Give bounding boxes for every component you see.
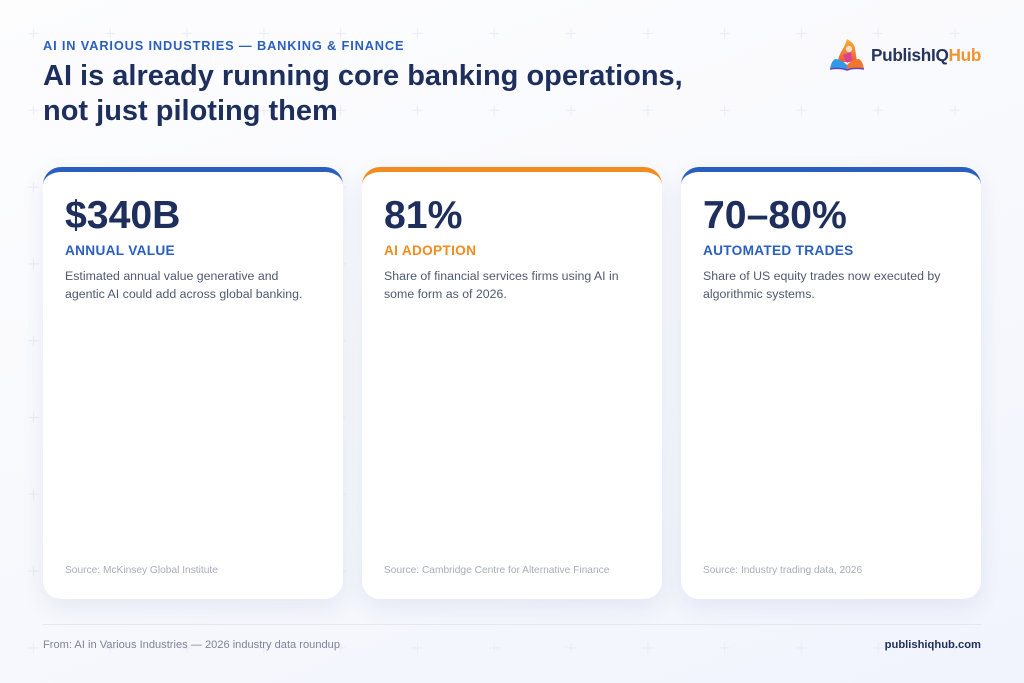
description: Share of US equity trades now executed by bbox=[703, 269, 940, 283]
stat: 81% bbox=[384, 194, 462, 237]
source: Source: McKinsey Global Institute bbox=[65, 565, 218, 576]
panel: AI adoption bbox=[362, 167, 662, 599]
description bbox=[65, 269, 302, 301]
description: algorithmic systems. bbox=[703, 287, 815, 301]
description: Share of financial services firms using AI in bbox=[384, 269, 619, 283]
title: AI is already running core banking operations, bbox=[43, 60, 683, 92]
source: Source: Industry trading data, 2026 bbox=[703, 565, 862, 576]
description: some form as of 2026. bbox=[384, 287, 507, 301]
panel: automated trades bbox=[681, 167, 981, 599]
description: agentic AI could add across global banking. bbox=[65, 287, 302, 301]
description bbox=[384, 269, 619, 301]
panel: annual value bbox=[43, 167, 343, 599]
description bbox=[703, 269, 940, 301]
title bbox=[43, 60, 683, 127]
footer source note: From: AI in Various Industries — 2026 industry data roundup bbox=[43, 639, 340, 651]
description: Estimated annual value generative and bbox=[65, 269, 278, 283]
label: ANNUAL VALUE bbox=[65, 243, 175, 258]
label: AI ADOPTION bbox=[384, 243, 476, 258]
stat: 70–80% bbox=[703, 194, 847, 237]
eyebrow: AI IN VARIOUS INDUSTRIES — BANKING & FINANCE bbox=[43, 38, 404, 53]
logo wordmark: PublishIQHub bbox=[871, 45, 981, 65]
footer site url: publishiqhub.com bbox=[885, 639, 981, 651]
source: Source: Cambridge Centre for Alternative Finance bbox=[384, 565, 609, 576]
icon: book and figure bbox=[830, 39, 864, 71]
stat: $340B bbox=[65, 194, 180, 237]
title: not just piloting them bbox=[43, 95, 338, 127]
label: AUTOMATED TRADES bbox=[703, 243, 854, 258]
logo bbox=[830, 39, 981, 71]
